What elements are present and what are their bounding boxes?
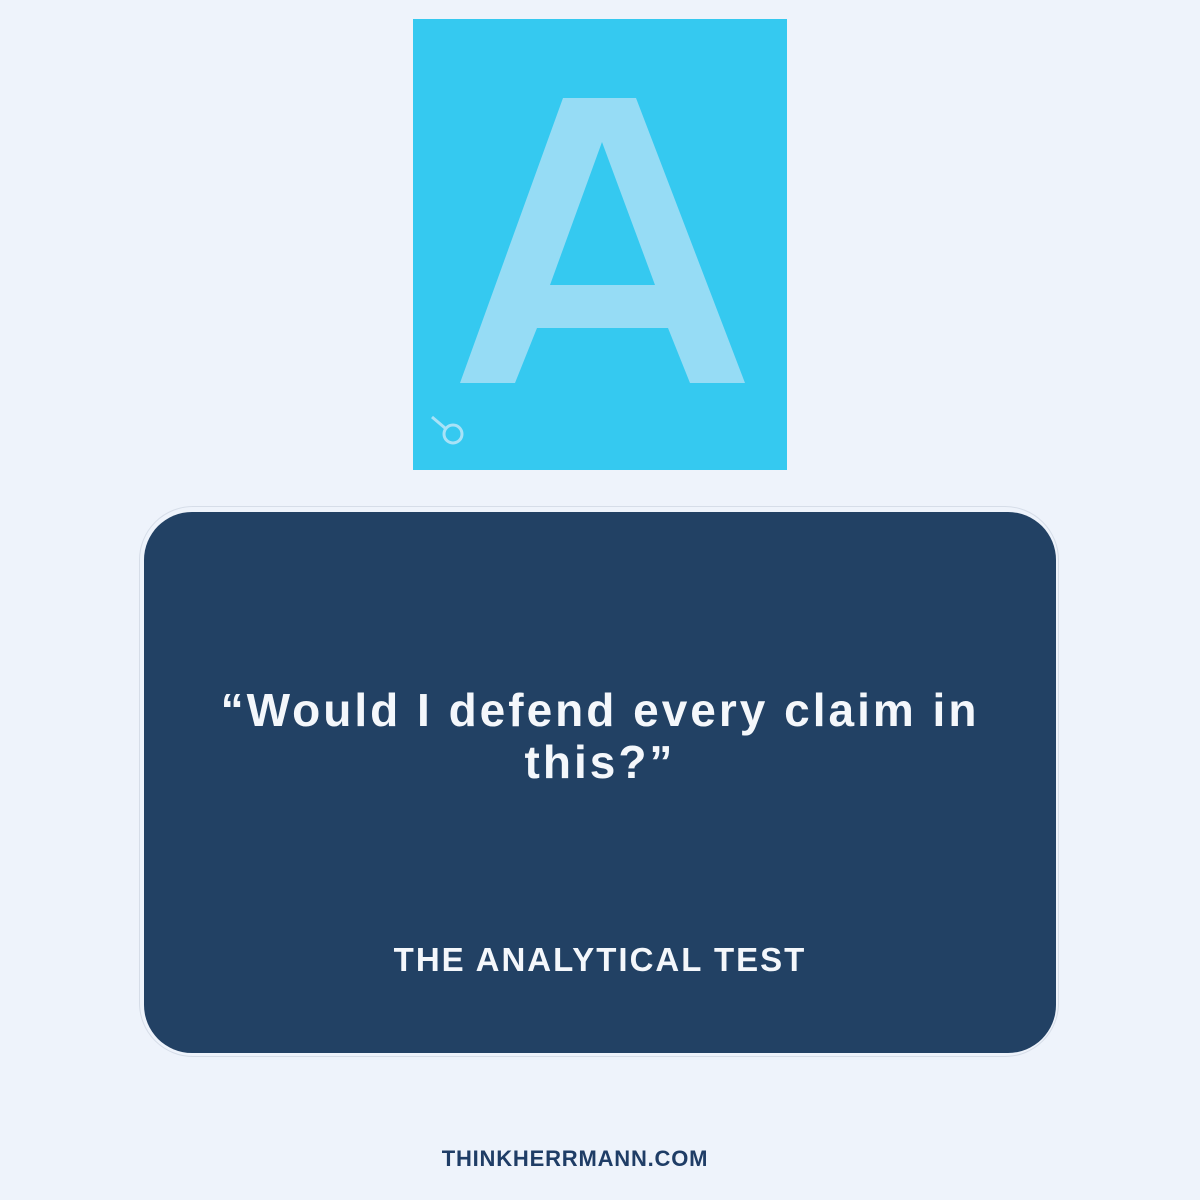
caption: THE ANALYTICAL TEST	[394, 941, 806, 978]
icon: small logo	[432, 417, 462, 443]
letter A	[460, 98, 745, 383]
quote text: “Would I defend every claim in this?”	[221, 684, 979, 788]
panel: quote card	[144, 512, 1056, 1053]
image: letter A tile	[413, 19, 787, 470]
footer: website: THINKHERRMANN.COM	[442, 1146, 708, 1171]
card outline	[139, 506, 1059, 1057]
